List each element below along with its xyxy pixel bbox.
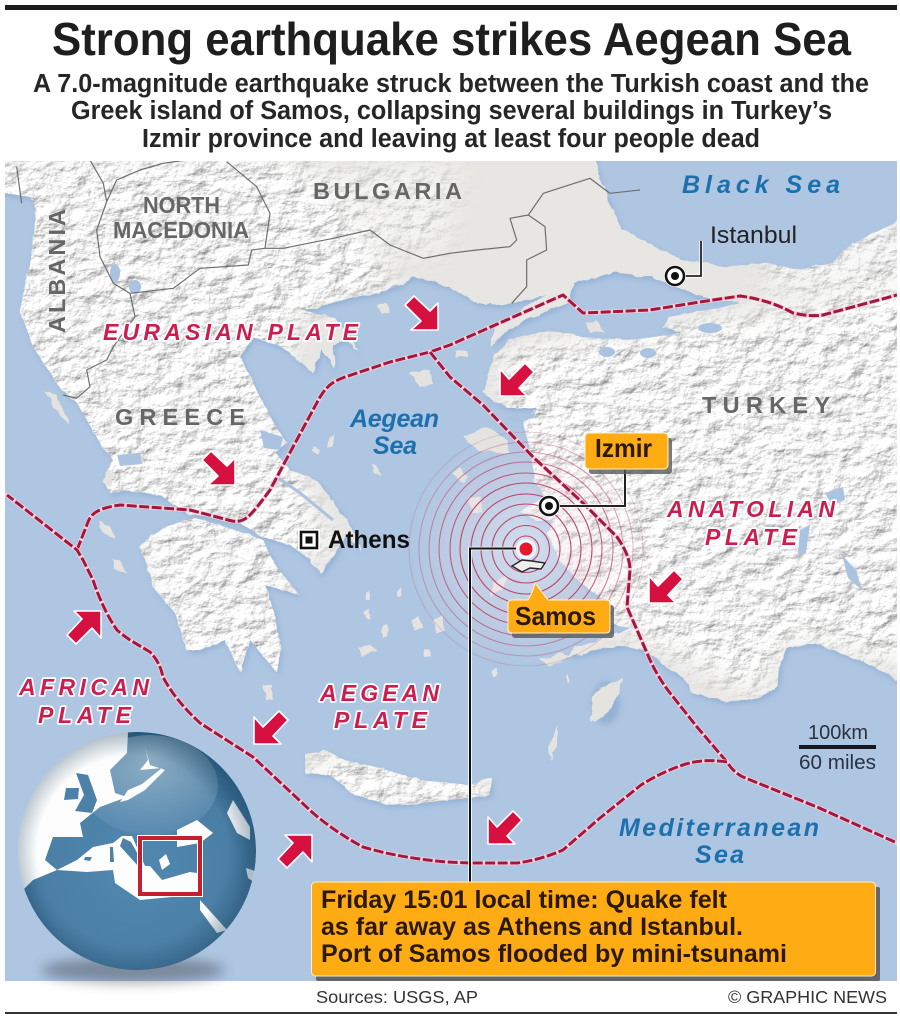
earthquake rings	[408, 431, 644, 667]
globe shadow	[41, 957, 225, 983]
label: North Macedonia: MACEDONIA	[113, 217, 249, 243]
label: Turkey: TURKEY	[702, 392, 830, 418]
callout: Samos: Samos	[515, 601, 596, 631]
label: Anatolian Plate	[666, 496, 835, 550]
label: Bulgaria: BULGARIA	[313, 178, 462, 204]
city: Izmir marker and leader	[538, 469, 625, 517]
title: Strong earthquake strikes Aegean Sea	[52, 13, 851, 65]
label: Aegean Plate: PLATE	[334, 707, 428, 733]
scale bar	[799, 721, 876, 774]
label: African Plate	[18, 674, 149, 728]
callout: timeline text: as far away as Athens and Istanbul.	[321, 913, 743, 941]
footer: credit: © GRAPHIC NEWS	[728, 987, 887, 1007]
footer: sources: Sources: USGS, AP	[316, 987, 478, 1007]
epicentre leader line	[470, 548, 516, 882]
scale bar: 60 miles	[799, 751, 876, 774]
arrow: north-east, African plate upper	[67, 611, 101, 644]
land	[0, 150, 900, 805]
arrow: south-west, south of Crete	[488, 811, 522, 844]
label: Mediterranean Sea: Sea	[695, 841, 744, 869]
coastal shading	[0, 153, 900, 808]
label: Aegean Sea: Sea	[373, 432, 417, 460]
terrain relief	[5, 161, 897, 805]
label: Greece: GREECE	[115, 404, 245, 430]
globe islands	[64, 773, 170, 870]
subtitle: Greek island of Samos, collapsing several buildings in Turkey’s	[71, 97, 832, 125]
label: Aegean Sea	[350, 410, 438, 454]
label: Aegean Plate	[319, 680, 439, 733]
plate boundary: northern	[77, 295, 897, 550]
callout: timeline text: Friday 15:01 local time: Quake felt	[321, 886, 728, 914]
arrow: south-west, Anatolia	[649, 570, 683, 603]
city: Istanbul: Istanbul	[710, 222, 797, 249]
label: North Macedonia	[114, 197, 248, 238]
label: Black Sea: Black Sea	[682, 171, 840, 199]
plate boundary: eastern	[430, 352, 897, 843]
label: Eurasian Plate: EURASIAN PLATE	[103, 319, 359, 345]
label: Aegean Sea: Aegean	[349, 405, 439, 433]
callout: timeline text: Port of Samos flooded by mini-tsunami	[321, 940, 787, 968]
label: African Plate: PLATE	[38, 702, 132, 728]
globe sphere	[5, 725, 258, 970]
locator square	[140, 838, 200, 894]
callout: timeline text	[312, 882, 880, 981]
label: Anatolian Plate: PLATE	[705, 524, 798, 550]
top rule	[5, 5, 897, 10]
sea background	[5, 161, 897, 981]
label: African Plate: AFRICAN	[18, 674, 149, 700]
callout: Izmir	[585, 433, 672, 474]
label: North Macedonia: NORTH	[143, 192, 220, 218]
city: Istanbul	[664, 222, 797, 287]
globe seas	[5, 725, 258, 933]
arrow: north-east, African plate lower	[278, 835, 312, 868]
arrow: south-west, Aegean plate	[254, 711, 288, 744]
callout: Samos	[508, 583, 614, 638]
label: Anatolian Plate: ANATOLIAN	[666, 496, 835, 522]
callout: Izmir: Izmir	[595, 433, 652, 463]
arrow: south-east, north Aegean	[405, 296, 438, 330]
label: Mediterranean Sea	[620, 818, 818, 863]
lakes and gulfs	[110, 264, 862, 634]
subtitle: Izmir province and leaving at least four people dead	[142, 125, 760, 153]
city: Athens	[298, 529, 409, 551]
islands	[45, 302, 623, 760]
island: Samos	[512, 560, 545, 572]
epicentre marker	[516, 539, 536, 559]
subtitle: A 7.0-magnitude earthquake struck between the Turkish coast and the	[33, 70, 869, 98]
arrow: south-east, Greece	[202, 451, 235, 485]
bottom rule	[5, 1012, 897, 1014]
globe locator	[5, 725, 258, 983]
label: Albania: ALBANIA	[44, 209, 70, 333]
city: Athens: Athens	[328, 526, 410, 554]
plate boundary: southern	[7, 495, 727, 863]
national borders	[17, 160, 640, 398]
label: Mediterranean Sea: Mediterranean	[619, 814, 819, 842]
label: Aegean Plate: AEGEAN	[319, 680, 439, 706]
scale bar: 100km	[808, 721, 868, 744]
subtitle	[33, 70, 869, 153]
arrow: south-west, north-west Turkey	[500, 363, 534, 396]
